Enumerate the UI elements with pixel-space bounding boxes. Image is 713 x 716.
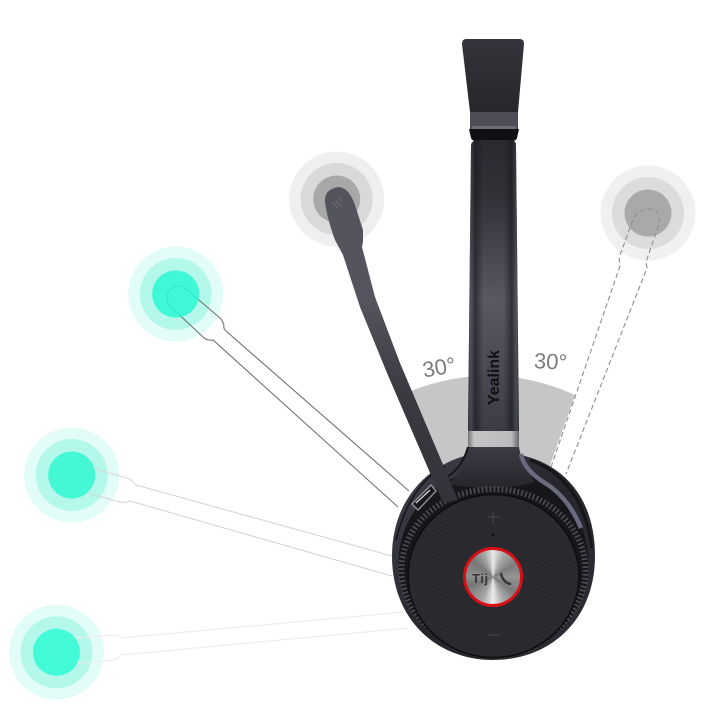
green position 2 with outline microphone <box>24 428 392 576</box>
green position 1 with outline microphone <box>128 246 409 507</box>
side port <box>412 485 436 510</box>
headband top pad <box>462 39 524 141</box>
outer band groove <box>530 460 592 548</box>
dashed right microphone outline position <box>551 166 696 474</box>
microphone holes <box>332 198 342 208</box>
call button with metal finish and red ring <box>463 547 523 607</box>
green target circles 3 <box>9 605 104 700</box>
gray target circles right <box>600 166 696 260</box>
angle fan: gray 30 degree sector <box>408 376 575 485</box>
headband arm <box>468 140 519 431</box>
green target circles 1 <box>128 246 223 342</box>
volume minus <box>487 634 499 636</box>
brand name: Yealink <box>486 350 503 405</box>
indicator dot <box>492 534 494 536</box>
gray target circles at raised microphone <box>289 152 384 246</box>
speaker grille ring <box>402 489 586 651</box>
button label: Teams logo text: Tij <box>472 571 489 586</box>
earcup fabric face <box>408 494 579 658</box>
volume plus <box>487 511 499 523</box>
earcup <box>392 447 595 660</box>
angle label right: 30° <box>533 348 568 375</box>
microphone boom <box>325 187 458 503</box>
yoke <box>447 447 535 488</box>
silver band <box>468 431 519 447</box>
green target circles 2 <box>24 428 119 522</box>
headband slider <box>469 112 519 141</box>
angle label left: 30° <box>421 352 458 383</box>
green position 3 with outline microphone <box>9 605 408 700</box>
